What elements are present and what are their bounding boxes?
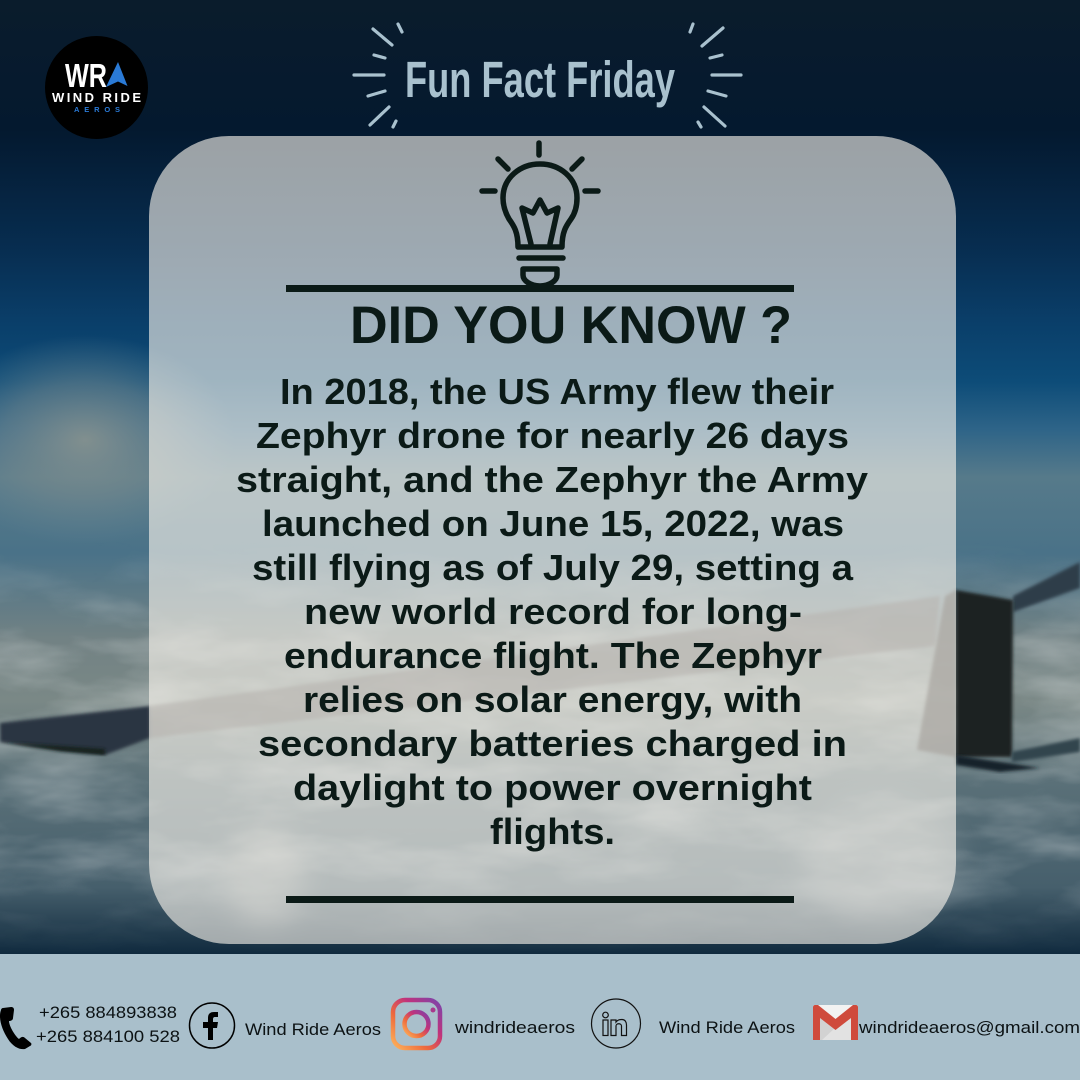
fact text block: new world record for long- xyxy=(304,591,802,632)
logo: Wind Ride Aeros: WR xyxy=(65,57,107,94)
fact text block: flights. xyxy=(490,811,615,852)
contact: phone numbers: +265 884893838 xyxy=(39,1003,177,1022)
logo: Wind Ride Aeros: AEROS xyxy=(74,105,120,114)
fact text block: In 2018, the US Army flew their xyxy=(280,371,834,412)
footer bar xyxy=(0,954,1080,1080)
contact: phone numbers: +265 884100 528 xyxy=(36,1027,180,1046)
fact text block xyxy=(236,371,868,852)
fact text block: relies on solar energy, with xyxy=(303,679,802,720)
title: Fun Fact Friday: Fun Fact Friday xyxy=(405,51,675,108)
contact: facebook name: Wind Ride Aeros xyxy=(245,1020,381,1039)
fact text block: secondary batteries charged in xyxy=(258,723,847,764)
contact: instagram handle: windrideaeros xyxy=(454,1018,575,1037)
contact: phone numbers xyxy=(36,1003,180,1046)
logo: Wind Ride Aeros: WIND RIDE xyxy=(52,90,141,105)
logo: Wind Ride Aeros xyxy=(45,36,148,139)
icon: phone xyxy=(0,1007,31,1049)
contact: linkedin name: Wind Ride Aeros xyxy=(659,1018,795,1037)
contact: email: windrideaeros@gmail.com xyxy=(858,1018,1080,1037)
icon: facebook xyxy=(190,1003,234,1048)
fact text block: launched on June 15, 2022, was xyxy=(262,503,844,544)
fact text block: daylight to power overnight xyxy=(293,767,812,808)
fact text block: endurance flight. The Zephyr xyxy=(284,635,822,676)
heading: did you know: DID YOU KNOW ? xyxy=(350,296,792,355)
fact text block: straight, and the Zephyr the Army xyxy=(236,459,868,500)
icon: gmail xyxy=(813,1005,858,1040)
top divider xyxy=(286,285,794,292)
title burst rays xyxy=(354,24,741,127)
fact text block: still flying as of July 29, setting a xyxy=(252,547,854,588)
icon: instagram xyxy=(393,1000,440,1048)
fact text block: Zephyr drone for nearly 26 days xyxy=(256,415,849,456)
icon: linkedin xyxy=(592,999,640,1048)
icon: light bulb xyxy=(482,143,598,286)
bottom divider xyxy=(286,896,794,903)
translucent panel xyxy=(149,136,956,944)
